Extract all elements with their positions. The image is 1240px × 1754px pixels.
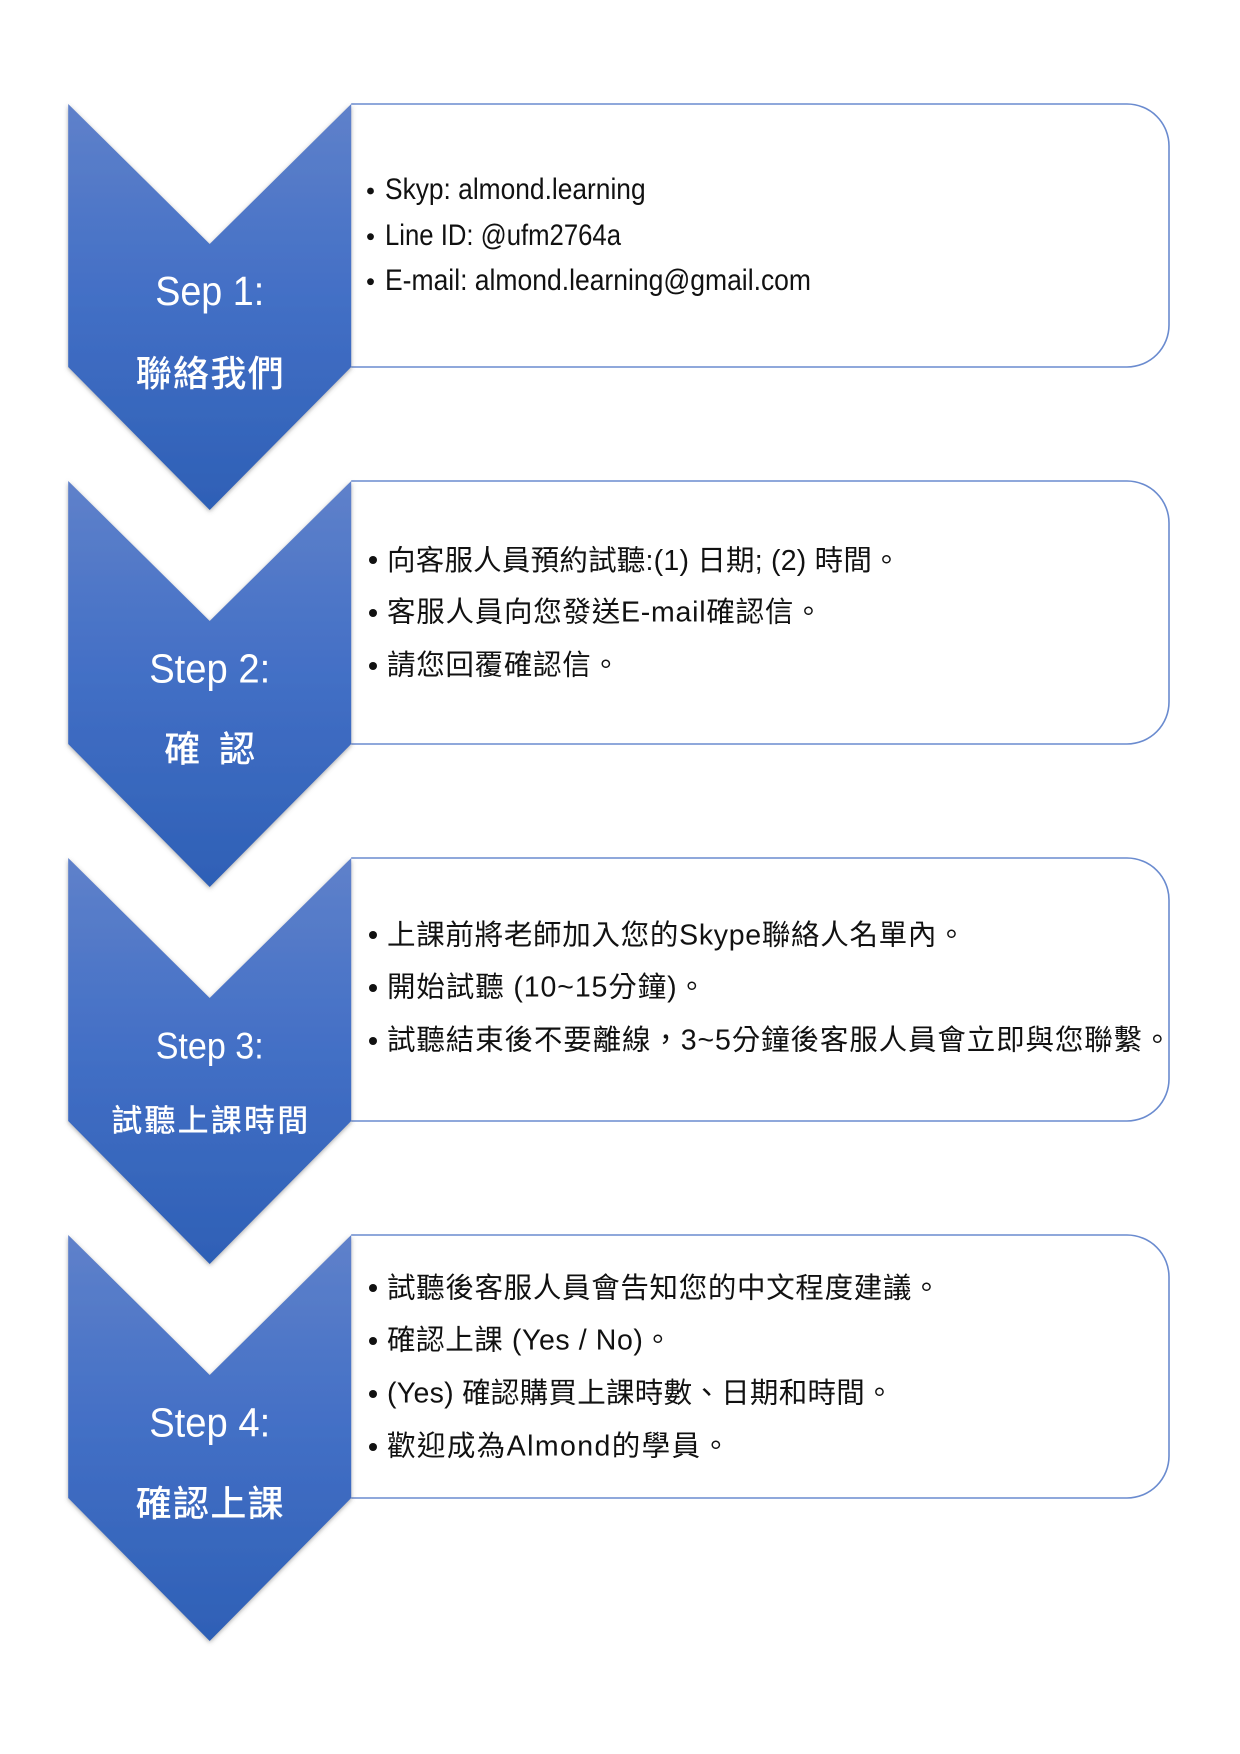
bullet list: contact details: Skyp: almond.learning <box>385 173 646 206</box>
bullet list: confirmation steps: 向客服人員預約試聽:(1) 日期; (2) 時間。 <box>387 545 901 577</box>
chevron: step 4 <box>68 1235 351 1641</box>
bullet list: confirmation steps: 請您回覆確認信。 <box>387 650 620 682</box>
step label: Step 2: <box>149 646 270 692</box>
bullet list: confirmation steps <box>369 545 901 682</box>
step title: 聯絡我們 <box>136 353 284 394</box>
panel: step 3 <box>68 858 1172 1264</box>
step label: Step 3: <box>156 1025 264 1066</box>
bullet list: confirm class steps <box>369 1272 941 1462</box>
bullet list: trial lesson steps: 試聽結束後不要離線，3~5分鐘後客服人員會立即與您聯繫。 <box>387 1024 1172 1056</box>
bullet list: confirmation steps: 客服人員向您發送E-mail確認信。 <box>387 597 823 629</box>
bullet list: trial lesson steps: 上課前將老師加入您的Skype聯絡人名單內。 <box>387 920 966 952</box>
panel: step 1 <box>68 104 1169 510</box>
panel: step 2 <box>68 481 1169 887</box>
panel: step 4 <box>68 1235 1169 1641</box>
text box: step 1 contact details <box>351 104 1169 367</box>
bullet list: confirm class steps: (Yes) 確認購買上課時數、日期和時間。 <box>387 1377 894 1409</box>
step title: 確認上課 <box>136 1483 284 1524</box>
bullet list: confirm class steps: 確認上課 (Yes / No)。 <box>387 1324 672 1356</box>
bullet list: trial lesson steps <box>369 920 1172 1056</box>
bullet list: contact details: Line ID: @ufm2764a <box>385 219 622 252</box>
bullet list: contact details: E-mail: almond.learning@gmail.com <box>385 264 811 297</box>
step title: 試聽上課時間 <box>111 1103 308 1138</box>
chevron: step 3 <box>68 858 351 1264</box>
step label: Step 4: <box>149 1399 270 1445</box>
chevron: step 2 <box>68 481 351 887</box>
text box: step 4 confirm classes <box>351 1235 1169 1498</box>
bullet list: trial lesson steps: 開始試聽 (10~15分鐘)。 <box>387 971 706 1003</box>
step title: 確 認 <box>164 728 255 769</box>
bullet list: contact details <box>367 173 811 297</box>
text box: step 3 trial lesson <box>351 858 1172 1121</box>
chevron: step 1 <box>68 104 351 510</box>
text box: step 2 confirmation <box>351 481 1169 744</box>
step label: Sep 1: <box>155 268 264 314</box>
bullet list: confirm class steps: 歡迎成為Almond的學員。 <box>387 1430 730 1462</box>
bullet list: confirm class steps: 試聽後客服人員會告知您的中文程度建議。 <box>387 1272 941 1304</box>
